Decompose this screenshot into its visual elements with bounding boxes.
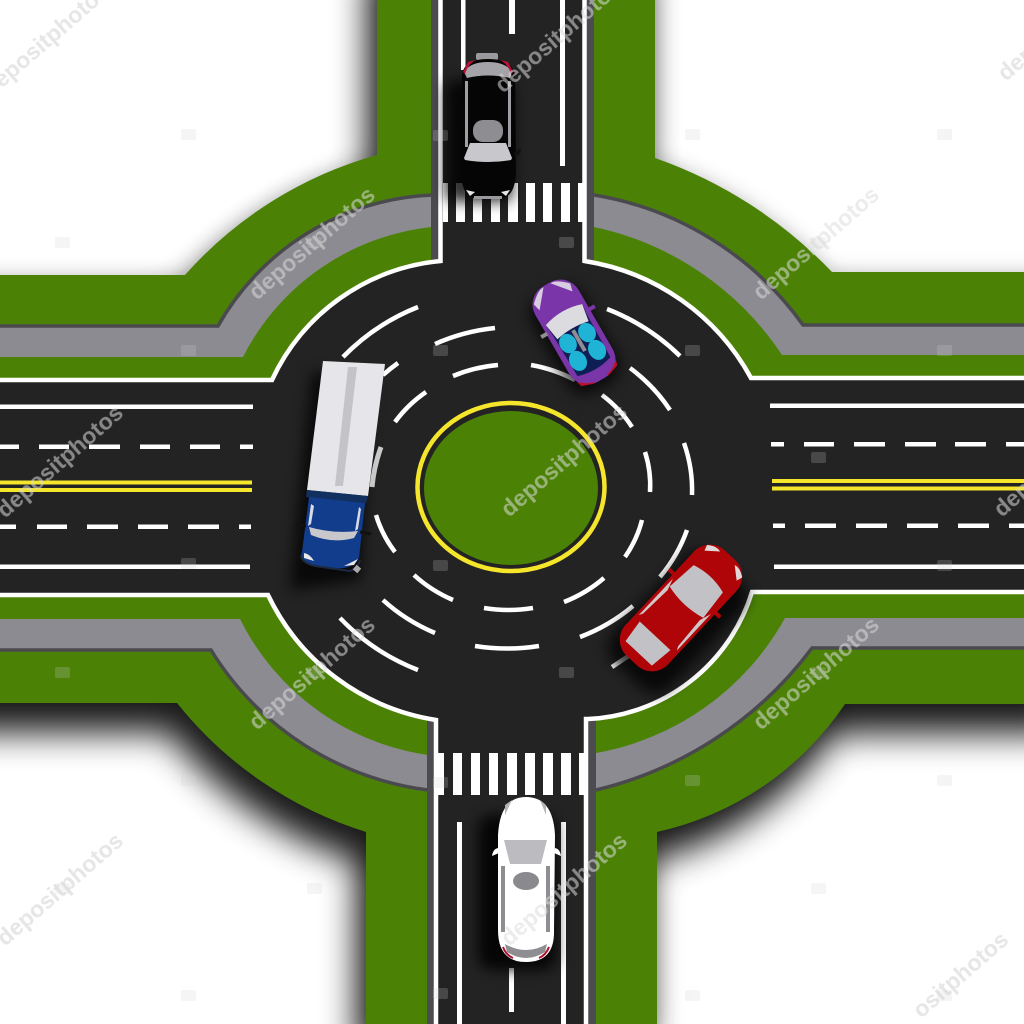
watermarks over road and verge: depositphotos (243, 181, 380, 305)
sidewalk: bottom right (596, 618, 1024, 790)
center island (418, 403, 604, 571)
watermarks over road and verge: depositphotos (495, 398, 632, 522)
truck cargo box (307, 361, 385, 496)
watermarks over road and verge: depositphotos (747, 181, 884, 305)
road kerbs (427, 0, 596, 1024)
car: red sedan (597, 531, 764, 702)
truck (290, 361, 385, 590)
road markings: left arm (0, 404, 253, 569)
truck cab (301, 497, 365, 568)
road markings: right arm (770, 404, 1024, 569)
watermarks over road and verge: depositphotos (243, 611, 380, 735)
watermarks over road and verge: depositphotos (495, 827, 632, 951)
watermarks over white background: ositphotos (908, 926, 1013, 1023)
sidewalk: top left (0, 195, 432, 357)
car: purple convertible (519, 269, 632, 402)
watermarks over road and verge: depositphotos (747, 611, 884, 735)
circulating lane dashes (340, 307, 692, 670)
car: white SUV (478, 797, 561, 970)
sidewalk: bottom left (0, 619, 428, 790)
sidewalk: top right (594, 195, 1024, 355)
car: black sedan (445, 53, 521, 202)
watermark camera icons (55, 129, 952, 1001)
road markings: top arm (461, 0, 565, 166)
road markings: bottom arm (457, 822, 566, 1024)
crosswalk: bottom (437, 753, 585, 795)
crosswalk: top (443, 183, 583, 222)
sidewalks (0, 195, 1024, 790)
